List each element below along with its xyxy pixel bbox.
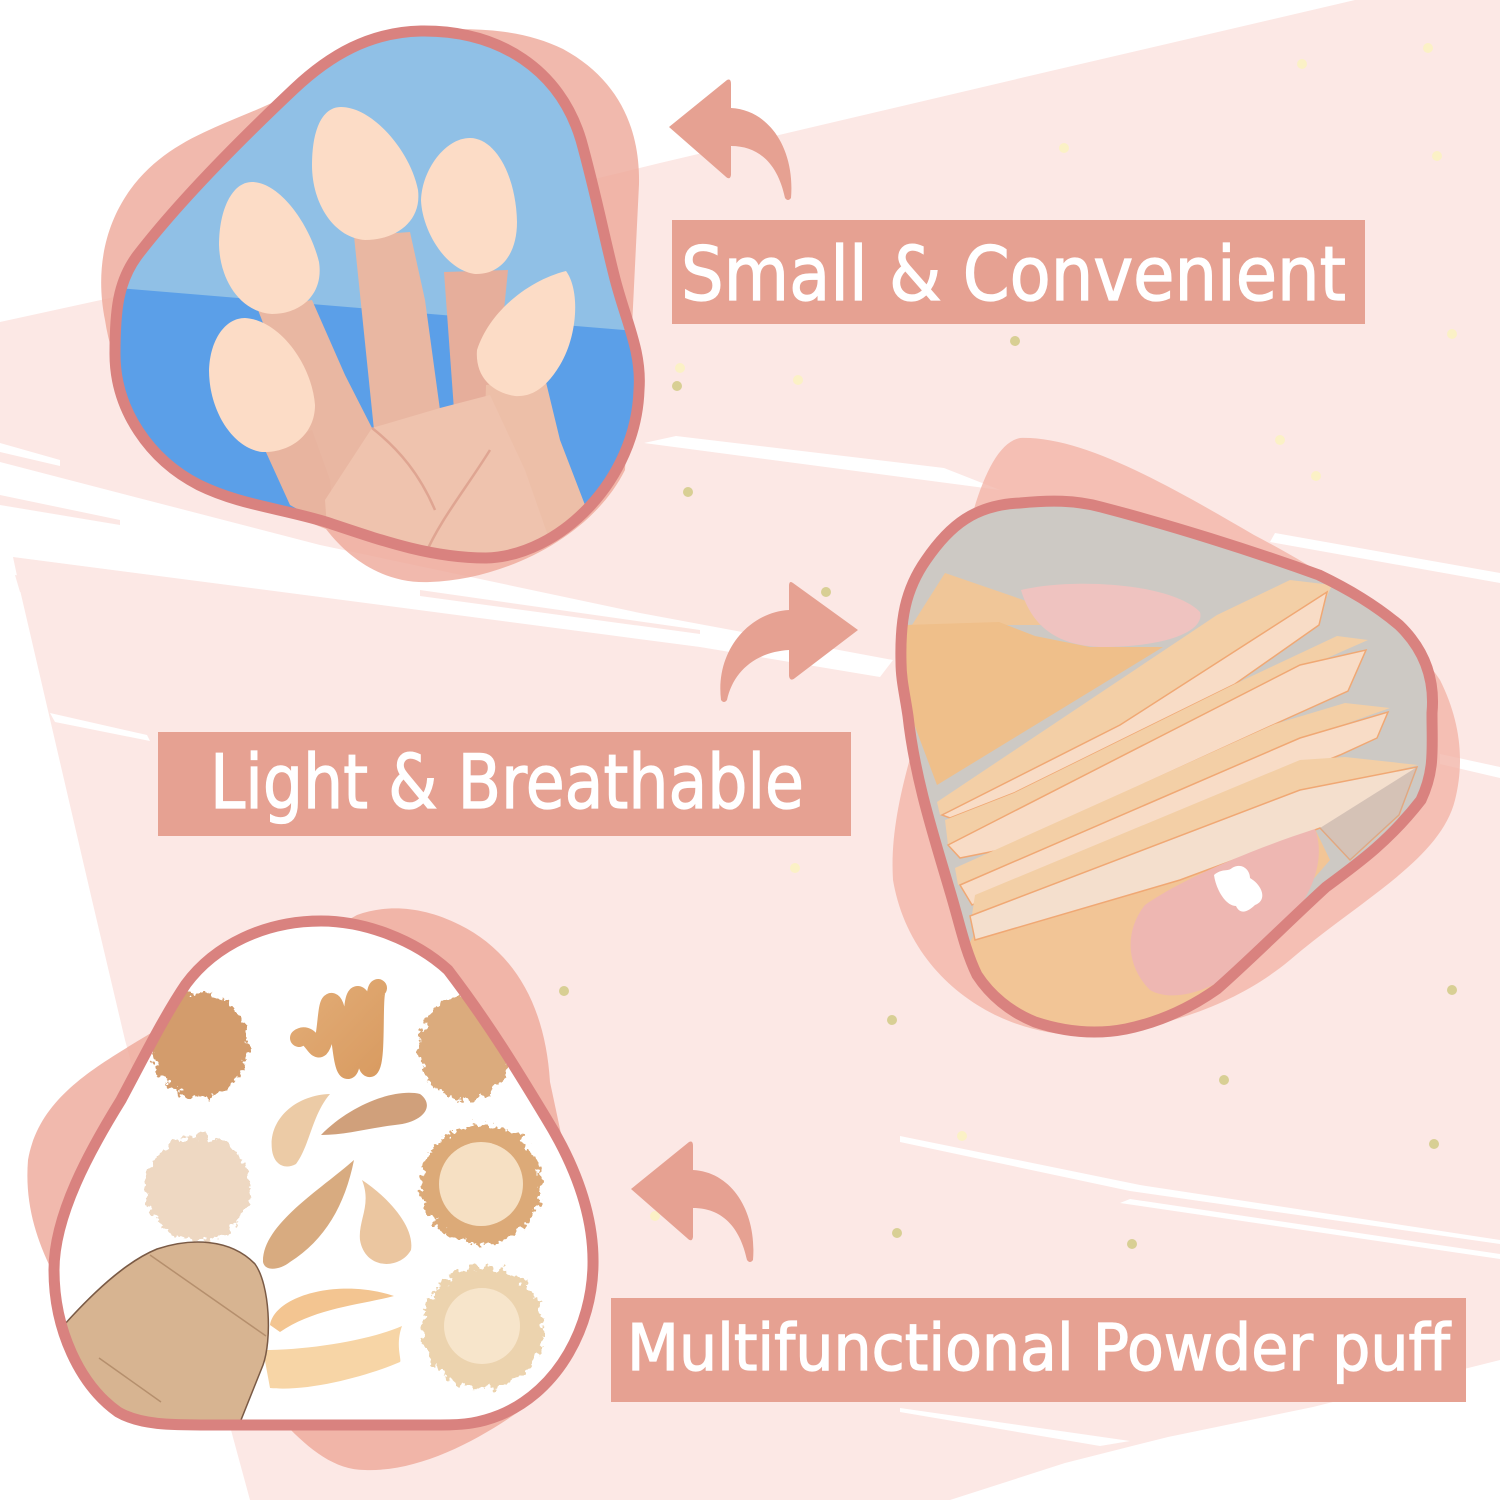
cloud nail art xyxy=(1214,866,1262,912)
beige puff xyxy=(60,1242,268,1430)
puff 4 xyxy=(972,757,1418,915)
puff 2 xyxy=(945,636,1368,845)
border xyxy=(115,31,639,558)
mini puffs xyxy=(209,107,575,452)
arrow: small and convenient xyxy=(669,80,791,200)
photo: fingers with mini puffs xyxy=(120,36,634,552)
photo: makeup swatches xyxy=(60,926,588,1420)
border xyxy=(54,921,593,1425)
label: multifunctional: Multifunctional Powder puff xyxy=(627,1312,1452,1386)
backing blob xyxy=(893,438,1460,1035)
liquid swatches xyxy=(263,988,427,1389)
backing blob xyxy=(101,29,639,582)
panel: multifunctional xyxy=(27,900,610,1470)
fingers and palm xyxy=(258,232,585,570)
panel: small and convenient xyxy=(90,20,660,590)
lower nail xyxy=(1131,829,1319,995)
upper finger xyxy=(912,573,1046,625)
label: light and breathable: Light & Breathable xyxy=(210,738,804,826)
label: small and convenient: Small & Convenient xyxy=(681,230,1346,318)
puff tip shadow xyxy=(1320,767,1417,860)
border xyxy=(901,501,1433,1032)
puff 3 xyxy=(955,703,1390,885)
arrow: light and breathable xyxy=(720,582,858,702)
photo: thin puffs held in fingers xyxy=(906,506,1427,1026)
powder swatches xyxy=(145,993,544,1389)
pressed powder centres xyxy=(439,1142,523,1364)
puff 1 xyxy=(937,580,1332,815)
lower finger xyxy=(960,829,1330,1040)
backing blob xyxy=(27,908,590,1470)
label: multifunctional xyxy=(611,1298,1466,1402)
upper nail xyxy=(1021,584,1200,647)
arrow: multifunctional xyxy=(631,1142,753,1262)
panel: light and breathable xyxy=(890,438,1460,1050)
